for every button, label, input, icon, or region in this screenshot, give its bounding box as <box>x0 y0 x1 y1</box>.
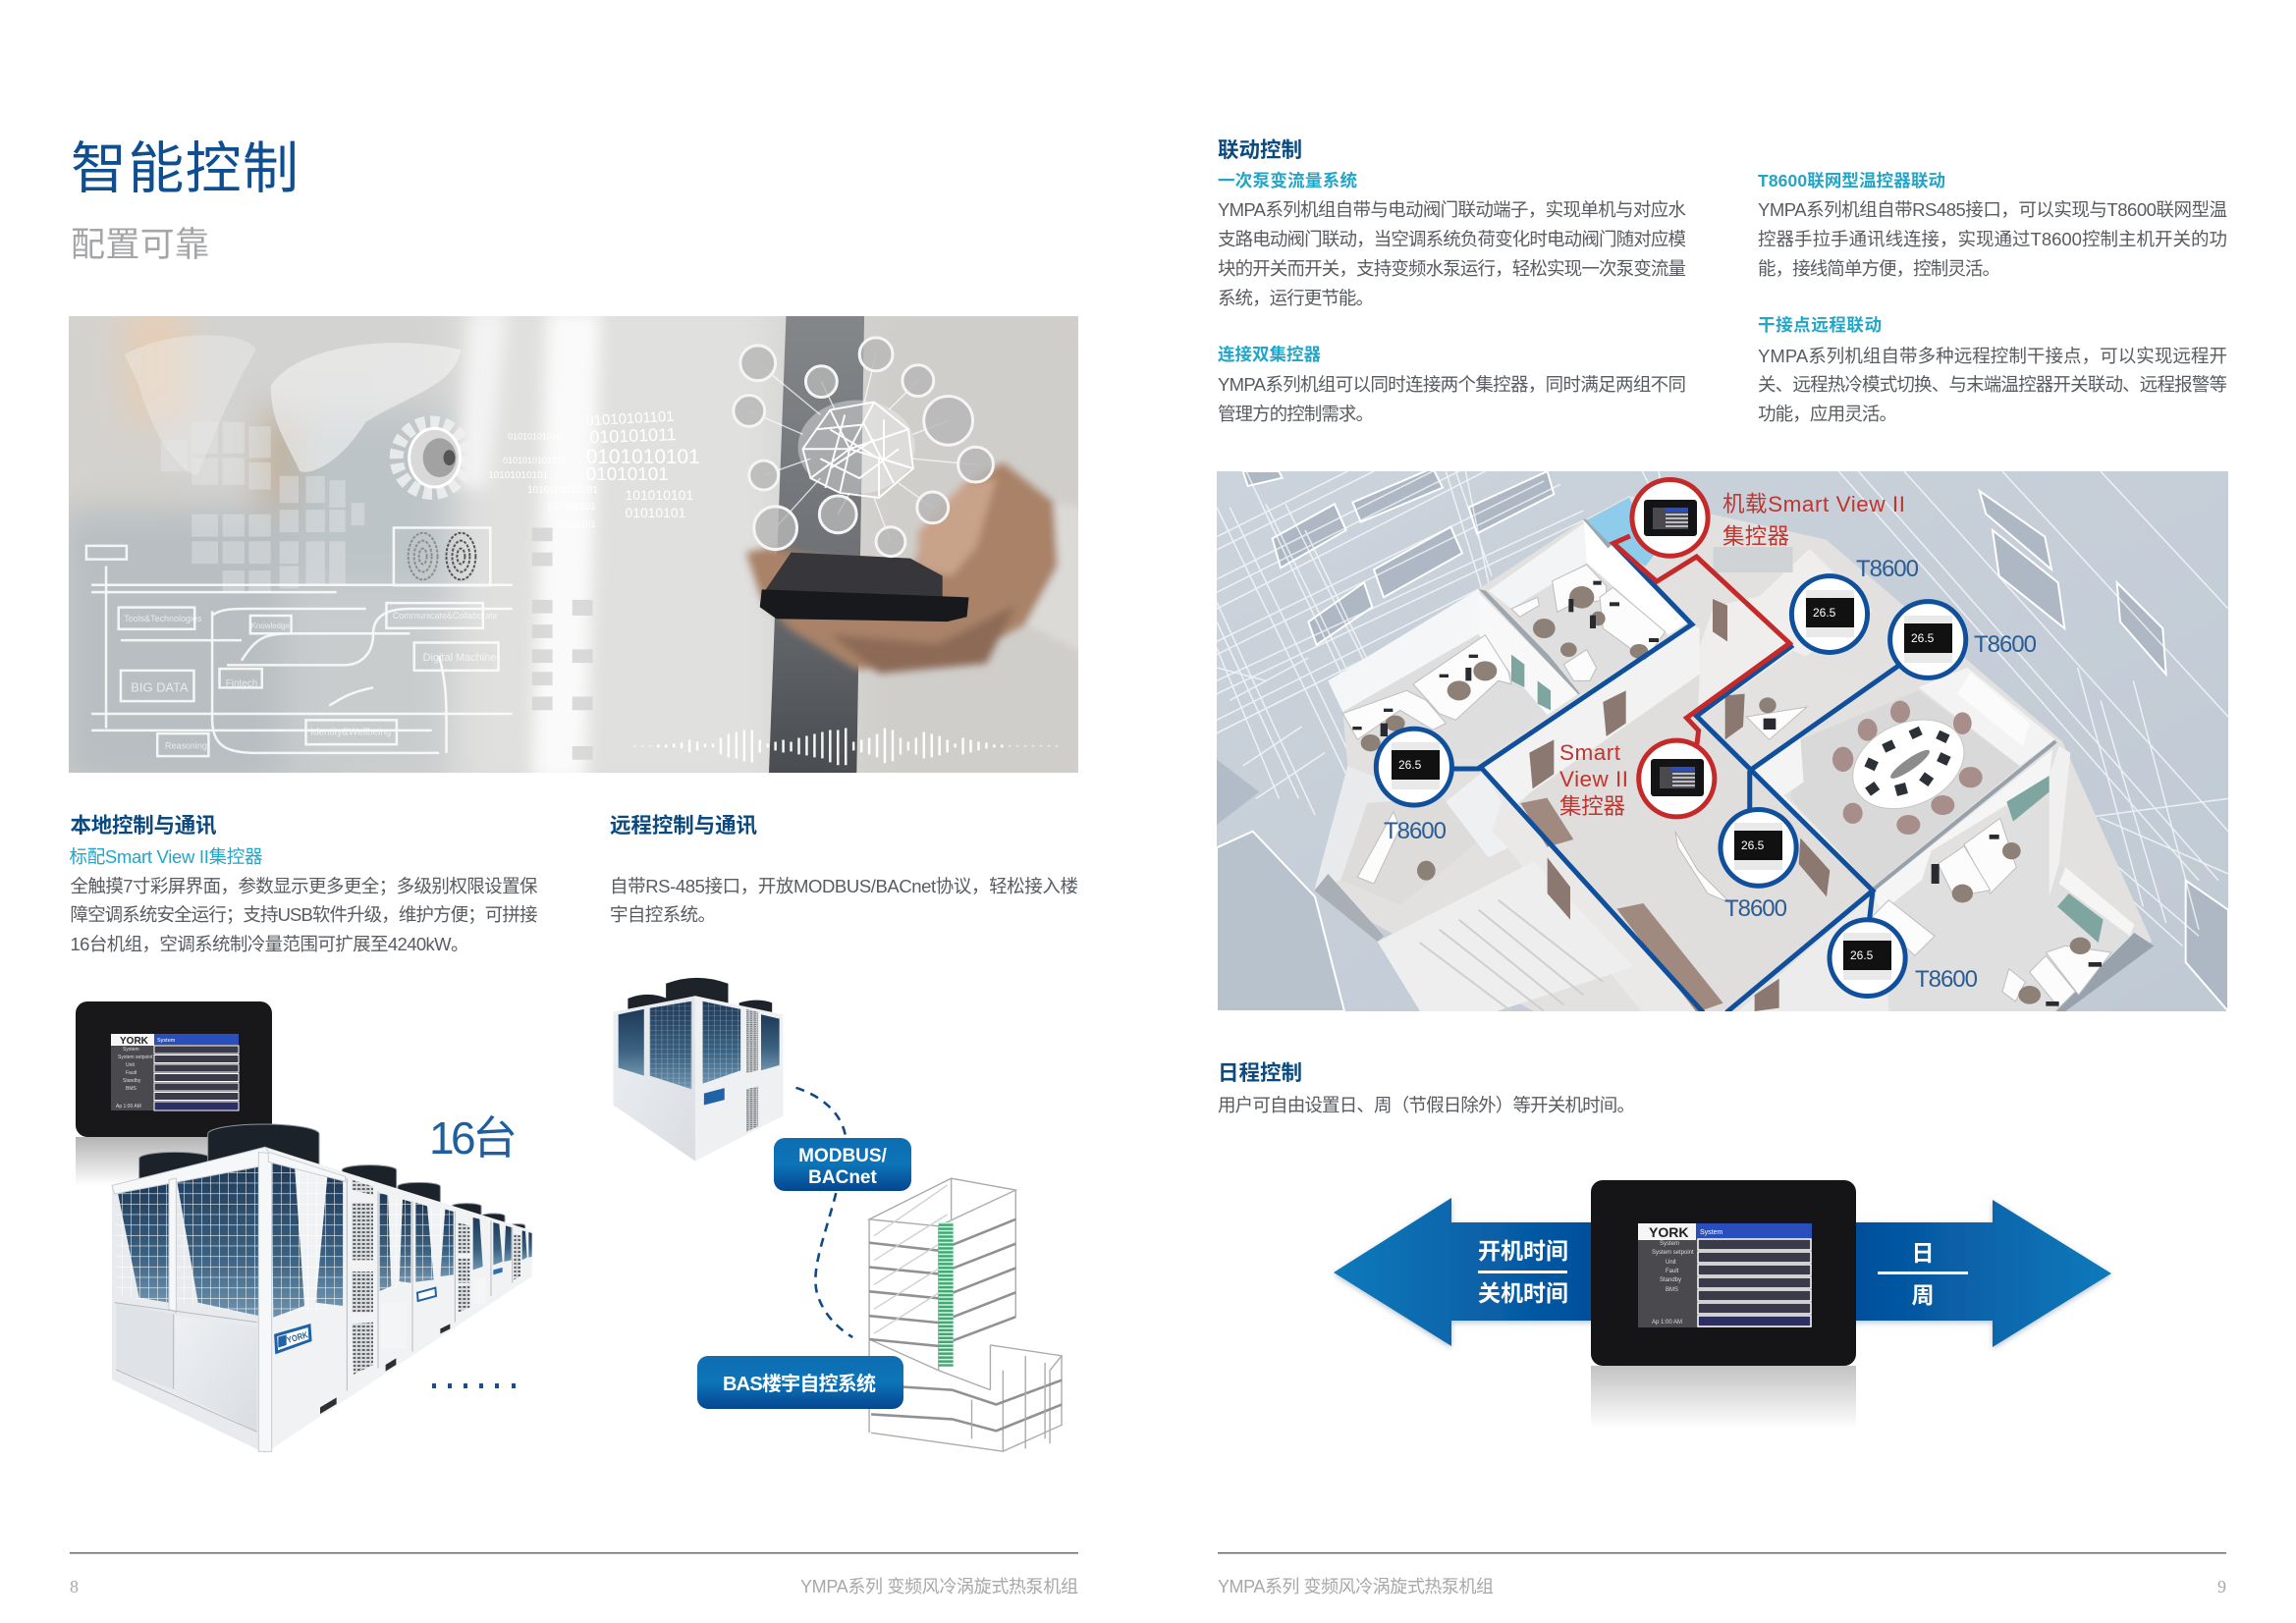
label: T8600 centre: T8600 <box>1724 895 1787 922</box>
footer: right page rule <box>1218 1552 2226 1553</box>
room 1 floor <box>1342 628 1580 759</box>
desks <box>1342 565 2111 1008</box>
pipe labels: Knowledge <box>251 622 290 630</box>
neural network <box>798 401 915 498</box>
icon: Smart View II controller panel: System <box>157 1038 176 1044</box>
icon circles <box>734 338 993 557</box>
sound wave <box>634 729 1057 765</box>
left lower room <box>1340 796 1481 905</box>
text block: local control <box>71 876 538 954</box>
icon: controller with reflection: Unit <box>1666 1260 1676 1266</box>
section: primary pump <box>1218 171 1686 308</box>
callout: BAS: BAS楼宇自控系统 <box>723 1372 876 1395</box>
binary data stream: 0101010101 <box>586 446 700 468</box>
conference table <box>1838 702 1979 826</box>
label: T8600 left: T8600 <box>1384 818 1447 844</box>
text block: local control: 障空调系统安全运行；支持USB软件升级，维护方便；可拼接 <box>71 904 538 925</box>
icon: building wireframe <box>869 1178 1062 1451</box>
text block: local control: 全触摸7寸彩屏界面，参数显示更多更全；多级别权限设置保 <box>71 876 538 896</box>
phone <box>766 552 943 597</box>
binary data stream: 101010101 <box>625 487 693 503</box>
floor plan illustration <box>1217 461 2228 1012</box>
icon: Smart View II controller panel: System setpoint <box>118 1055 153 1060</box>
label: T8600 top: T8600 <box>1856 556 1919 582</box>
office chairs <box>1361 586 2091 1004</box>
icon: Smart View II controller panel: System <box>123 1047 139 1053</box>
section: dual controllers: 连接双集控器 <box>1218 345 1322 364</box>
icon ring lines <box>764 371 957 526</box>
section: primary pump: YMPA系列机组自带与电动阀门联动端子，实现单机与对应水 <box>1218 199 1686 220</box>
icon: controller with reflection: YORK <box>1649 1224 1688 1240</box>
wireframe line bundles <box>1217 461 2228 946</box>
text block: local control: 16台机组，空调系统制冷量范围可扩展至4240kW。 <box>71 934 469 954</box>
Smart View controller screens <box>1644 500 1704 796</box>
label: T8600 bottom: T8600 <box>1915 966 1978 993</box>
pool <box>1587 498 1656 567</box>
thermostat readouts <box>1398 606 1935 962</box>
grilles <box>352 1180 520 1375</box>
mesh <box>116 1163 454 1318</box>
section: dry contact: 功能，应用灵活。 <box>1758 404 1897 424</box>
room 1 back wall <box>1328 589 1489 712</box>
pipe labels: Reasoning <box>165 740 207 750</box>
gear and eye <box>397 422 466 493</box>
binary data stream: 01010101 <box>625 505 686 520</box>
panel seams <box>115 1178 513 1432</box>
thermostat readouts: 26.5 <box>1813 606 1836 620</box>
York logo: YORK <box>286 1329 309 1345</box>
label: Smart View II: Smart <box>1559 740 1621 765</box>
arrow label: on/off time: 关机时间 <box>1478 1280 1568 1306</box>
corridor side wall <box>1488 780 1695 1011</box>
chiller front body <box>112 1147 265 1453</box>
section: T8600: YMPA系列机组自带RS485接口，可以实现与T8600联网型温 <box>1758 199 2227 220</box>
arrow label: on/off time: 开机时间 <box>1478 1238 1568 1264</box>
text block: remote control: 宇自控系统。 <box>610 904 716 925</box>
callout: MODBUS/BACnet <box>774 1138 911 1191</box>
ellipsis dots <box>432 1383 516 1388</box>
dark office items <box>1352 581 2102 1006</box>
binary data stream: 01010101101 <box>585 409 675 429</box>
icon: controller with reflection: System setpoint <box>1652 1250 1694 1256</box>
building floor <box>1314 496 2152 1011</box>
room 2 back wall <box>1489 523 1587 609</box>
thermostat readouts: 26.5 <box>1850 948 1874 962</box>
footer: left page rule <box>70 1552 1078 1553</box>
callout: MODBUS/BACnet: MODBUS/ <box>798 1146 888 1166</box>
coils <box>118 1163 532 1318</box>
icon: controller with reflection: BMS <box>1666 1287 1678 1293</box>
thermostat readouts: 26.5 <box>1741 839 1765 852</box>
lower right room <box>2005 992 2058 1011</box>
label: onboard Smart View II: 集控器 <box>1722 524 1789 549</box>
icon: controller with reflection: Standby <box>1660 1277 1681 1283</box>
blue network lines <box>1481 543 1703 1012</box>
reception room <box>1709 651 1805 712</box>
red network lines <box>1613 536 1789 747</box>
fingerprints <box>409 533 475 579</box>
frame posts <box>112 1147 346 1451</box>
footer title right: YMPA系列 变频风冷涡旋式热泵机组 <box>1218 1577 1494 1596</box>
text block: remote control: 自带RS-485接口，开放MODBUS/BACnet协议，轻松接入楼 <box>610 876 1078 896</box>
pipe labels: Digital Machine <box>423 652 496 664</box>
arrow label: day/week: 周 <box>1911 1282 1935 1308</box>
binary data stream <box>488 409 700 529</box>
stairs <box>1377 867 1611 1011</box>
pipe labels: Fintech <box>226 678 257 689</box>
heading: local control: 本地控制与通讯 <box>71 814 217 838</box>
heading: schedule control: 日程控制 <box>1218 1061 1302 1085</box>
chiller side body <box>265 1147 532 1453</box>
icon: controller with reflection: Ap 1:00 AM <box>1652 1320 1682 1325</box>
binary data stream: 1010101010101 <box>527 485 598 496</box>
reception block <box>1693 549 1873 716</box>
hand <box>746 462 1058 670</box>
binary data stream: 01010101 <box>557 519 596 529</box>
pipe network <box>86 527 513 756</box>
section: dry contact: 关、远程热冷模式切换、与末端温控器开关联动、远程报警等 <box>1758 374 2227 395</box>
section: T8600: T8600联网型温控器联动 <box>1758 171 1945 190</box>
controller circles <box>1376 480 1966 996</box>
corridor floor <box>1694 675 1699 708</box>
squares columns <box>532 527 593 760</box>
conference chairs <box>1832 701 1983 835</box>
binary data stream: 01010101 <box>586 464 669 485</box>
label: Smart View II <box>1559 740 1628 819</box>
fans <box>139 1124 525 1232</box>
callout: BAS <box>697 1356 903 1409</box>
icon: Smart View II controller panel: Standby <box>123 1078 141 1084</box>
section: dry contact: 干接点远程联动 <box>1758 315 1882 335</box>
pipe labels: Communicate&Collaborate <box>393 611 498 621</box>
arrow label: day/week: 日 <box>1911 1240 1935 1266</box>
arrow: on/off time <box>1334 1198 1596 1346</box>
arrow label: day/week <box>1878 1240 1968 1308</box>
label: T8600 right: T8600 <box>1974 631 2037 658</box>
icon: controller with reflection: System <box>1700 1229 1723 1236</box>
section: dry contact <box>1758 315 2227 424</box>
thermostat readouts: 26.5 <box>1911 631 1935 645</box>
icon: Smart View II controller panel: Ap 1:00 AM <box>116 1104 141 1109</box>
section: primary pump: 支路电动阀门联动，当空调系统负荷变化时电动阀门随对应模 <box>1218 229 1686 249</box>
conference room <box>1790 690 2020 887</box>
page number 8: 8 <box>70 1577 79 1596</box>
doors <box>1529 599 1830 1011</box>
icon: Smart View II controller panel: BMS <box>126 1086 137 1092</box>
icon: Smart View II controller panel: YORK <box>120 1036 149 1047</box>
wireframe windows <box>1217 468 2228 1011</box>
binary data stream: 0101010101010 <box>503 456 567 465</box>
heading: linkage control: 联动控制 <box>1218 138 1302 162</box>
partition <box>1479 592 1578 715</box>
icon: controller with reflection <box>1591 1180 1856 1429</box>
binary data stream: 01010101010 <box>508 431 562 441</box>
page number 9: 9 <box>2217 1577 2226 1596</box>
subheading: Smart View II: 标配Smart View II集控器 <box>69 846 263 867</box>
section: dual controllers <box>1218 345 1686 424</box>
pipe labels: BIG DATA <box>131 680 189 695</box>
label: Smart View II: 集控器 <box>1559 794 1625 819</box>
teal cabinets <box>1511 655 2104 943</box>
pipe labels: Tools&Technologies <box>124 614 202 623</box>
label: onboard Smart View II <box>1722 492 1905 549</box>
section: T8600 <box>1758 171 2227 279</box>
room 2 floor <box>1550 565 1667 693</box>
title: 智能控制 <box>71 137 299 200</box>
dashed link lines <box>796 1088 852 1337</box>
wall below blue line <box>1482 625 1700 815</box>
T8600 thermostat screens <box>1392 590 1952 980</box>
icon: single chiller <box>613 978 783 1161</box>
footer title left: YMPA系列 变频风冷涡旋式热泵机组 <box>800 1577 1078 1596</box>
thermostat readouts: 26.5 <box>1398 758 1422 772</box>
section: dry contact: YMPA系列机组自带多种远程控制干接点，可以实现远程开 <box>1758 346 2227 366</box>
section: primary pump: 一次泵变流量系统 <box>1218 171 1357 190</box>
section: T8600: 控器手拉手通讯线连接，实现通过T8600控制主机开关的功 <box>1758 229 2227 249</box>
label: Smart View II: View II <box>1559 767 1628 791</box>
pipe labels <box>124 611 498 750</box>
icon: Smart View II controller panel: Fault <box>126 1070 137 1076</box>
lower front panels <box>116 1303 174 1389</box>
icon: Smart View II controller panel <box>76 1001 272 1186</box>
label: 16 units: 16台 <box>429 1112 518 1163</box>
heading: remote control: 远程控制与通讯 <box>610 814 757 838</box>
callout: MODBUS/BACnet: BACnet <box>808 1167 878 1188</box>
section: primary pump: 块的开关而开关，支持变频水泵运行，轻松实现一次泵变流量 <box>1218 258 1686 279</box>
subtitle: 配置可靠 <box>71 226 209 264</box>
text block: remote control <box>610 876 1078 925</box>
text block: schedule: 用户可自由设置日、周（节假日除外）等开关机时间。 <box>1218 1095 1635 1115</box>
label: onboard Smart View II: 机载Smart View II <box>1722 492 1905 516</box>
icon: controller with reflection: System <box>1660 1241 1679 1247</box>
section: primary pump: 系统，运行更节能。 <box>1218 288 1374 308</box>
conference room wall <box>1876 749 2052 916</box>
binary data stream: 10101010101 <box>488 470 549 481</box>
arrow: day/week <box>1851 1200 2111 1347</box>
vents <box>320 1324 450 1414</box>
icon: 16 chiller units row <box>112 1124 532 1453</box>
photo: smart control hero image <box>69 316 1078 773</box>
section: dual controllers: 管理方的控制需求。 <box>1218 404 1374 424</box>
sofas <box>1520 798 1723 1012</box>
icon: controller with reflection: Fault <box>1666 1269 1679 1274</box>
section: T8600: 能，接线简单方便，控制灵活。 <box>1758 258 2000 279</box>
map and tiles overlay <box>86 335 593 760</box>
green riser <box>939 1222 954 1367</box>
pipe labels: Identity&Wellbeing <box>310 727 391 737</box>
binary data stream: 010101011 <box>589 424 677 447</box>
icon: Smart View II controller panel: Unit <box>126 1062 136 1068</box>
logo plates <box>276 1325 310 1352</box>
arrow label: on/off time <box>1478 1238 1568 1306</box>
binary data stream: 101010101 <box>547 502 596 513</box>
section: dual controllers: YMPA系列机组可以同时连接两个集控器，同时满足两组不同 <box>1218 374 1686 395</box>
